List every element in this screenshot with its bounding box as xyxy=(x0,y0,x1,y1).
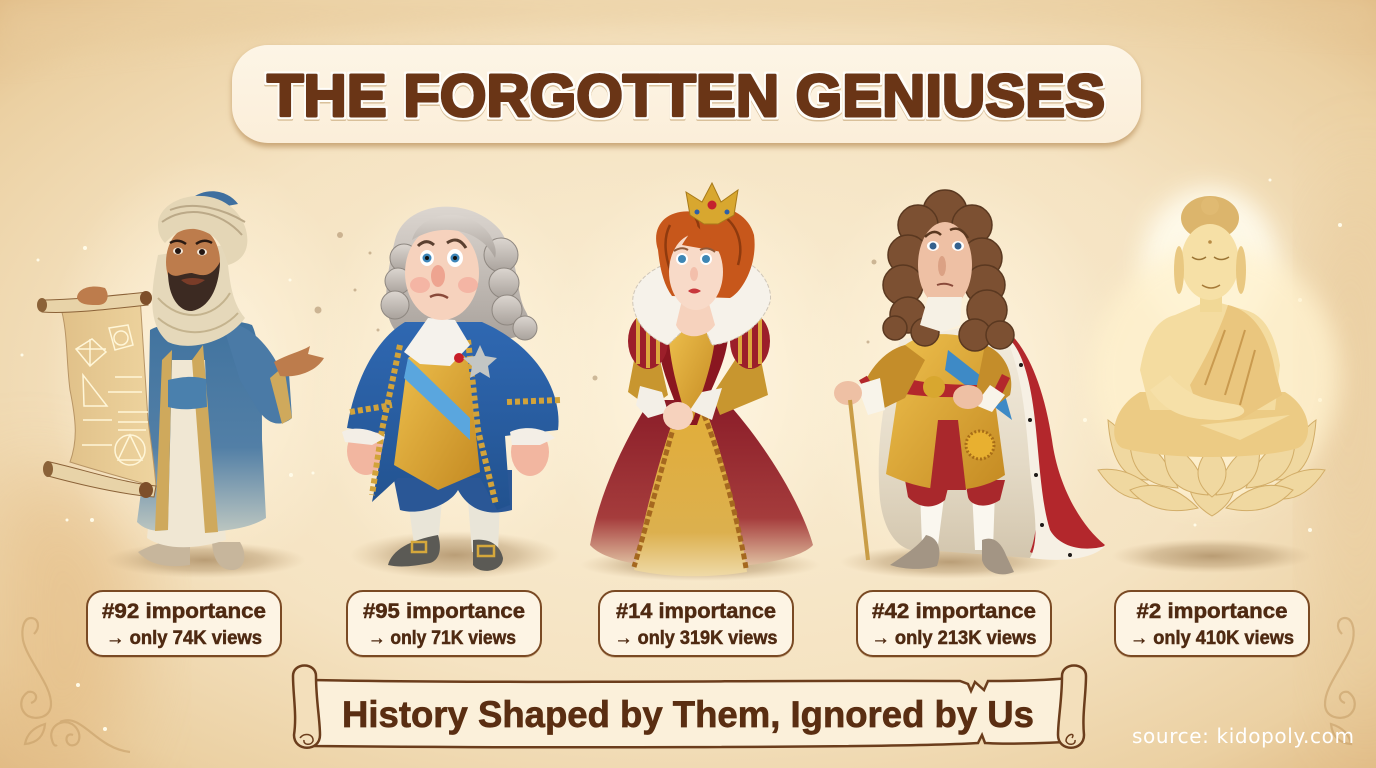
lace cravat xyxy=(920,297,962,332)
scarf xyxy=(152,245,245,346)
source credit: source: kidopoly.com xyxy=(1132,724,1354,748)
label: figure 5 xyxy=(1115,591,1309,658)
gold waistcoat xyxy=(394,345,480,490)
figure: bewigged nobleman in blue coat xyxy=(342,207,560,579)
label: figure 4 xyxy=(857,591,1051,658)
cuffs and hands xyxy=(636,386,722,420)
sun emblem xyxy=(966,431,994,459)
ermine trim xyxy=(1005,335,1105,560)
label: figure 2: #95 importance xyxy=(363,600,525,623)
white cuffs xyxy=(857,378,1005,415)
hand xyxy=(274,346,324,376)
label: figure 3: #14 importance xyxy=(616,600,776,623)
label: figure 3 xyxy=(599,591,793,658)
figure: king with long curly wig and ermine cape xyxy=(834,190,1105,579)
title pill xyxy=(232,45,1141,147)
wig top xyxy=(412,215,496,258)
crown xyxy=(686,183,738,224)
title text: THE FORGOTTEN GENIUSES xyxy=(267,63,1105,129)
blue coat xyxy=(347,322,559,510)
label: figure 2: → only 71K views xyxy=(368,628,516,649)
hands xyxy=(1150,375,1244,420)
cane xyxy=(850,400,868,560)
scroll xyxy=(37,286,156,498)
label: figure 4: #42 importance xyxy=(872,600,1036,623)
turban xyxy=(190,191,238,210)
face xyxy=(405,226,479,320)
lotus xyxy=(1098,420,1325,516)
blue robe xyxy=(137,320,266,532)
figure: scholar with scroll xyxy=(37,191,324,578)
figure: queen in red and gold gown xyxy=(580,183,820,581)
lace cravat xyxy=(404,318,470,366)
cape inner xyxy=(879,320,1060,558)
head xyxy=(1181,196,1239,240)
puffed shoulders xyxy=(628,313,668,369)
scroll banner xyxy=(293,666,1086,748)
figure: golden Buddha on lotus xyxy=(1090,187,1340,573)
sash xyxy=(168,377,207,409)
label: figure 5: #2 importance xyxy=(1136,600,1288,623)
label: figure 3: → only 319K views xyxy=(614,628,778,649)
sleeves xyxy=(862,345,1011,410)
wig curls xyxy=(381,238,537,340)
right sleeve xyxy=(222,322,292,424)
hands xyxy=(834,381,862,405)
ruff collar xyxy=(633,258,771,345)
red belt xyxy=(905,378,995,397)
label: figure 1: → only 74K views xyxy=(106,628,262,649)
red outer cape xyxy=(1000,325,1105,558)
gold coat xyxy=(886,334,1005,490)
bodice xyxy=(657,320,728,425)
label: figure 2 xyxy=(347,591,541,658)
gold embroidery xyxy=(350,340,560,505)
label: figure 1: #92 importance xyxy=(102,600,266,623)
white under-robe xyxy=(147,345,226,547)
stockings xyxy=(408,500,500,552)
blue sash xyxy=(945,350,1012,420)
lace cuffs xyxy=(342,428,555,445)
shoes xyxy=(388,535,503,571)
label: figure 5: → only 410K views xyxy=(1130,628,1294,649)
neck and chest xyxy=(676,300,715,336)
breeches xyxy=(392,470,512,513)
face xyxy=(918,222,972,308)
hands xyxy=(347,427,385,475)
shoes xyxy=(138,541,244,570)
skirt xyxy=(590,400,813,568)
beard xyxy=(168,262,220,311)
decorative corner swirls xyxy=(21,618,1355,752)
face xyxy=(669,234,723,310)
blue sash xyxy=(404,358,470,440)
shoes xyxy=(890,535,1014,574)
wig back xyxy=(386,207,529,339)
label: figure 4: → only 213K views xyxy=(872,628,1036,649)
banner text: History Shaped by Them, Ignored by Us xyxy=(342,694,1034,735)
face xyxy=(166,226,220,298)
torso and robe xyxy=(1140,300,1280,410)
hair xyxy=(656,207,755,298)
medal xyxy=(454,353,464,363)
long curly wig xyxy=(883,190,1014,351)
gold skirt panel xyxy=(634,400,747,576)
lower sleeves xyxy=(628,355,768,415)
legs xyxy=(920,490,995,550)
label: figure 1 xyxy=(87,591,281,658)
crossed legs xyxy=(1114,392,1308,457)
